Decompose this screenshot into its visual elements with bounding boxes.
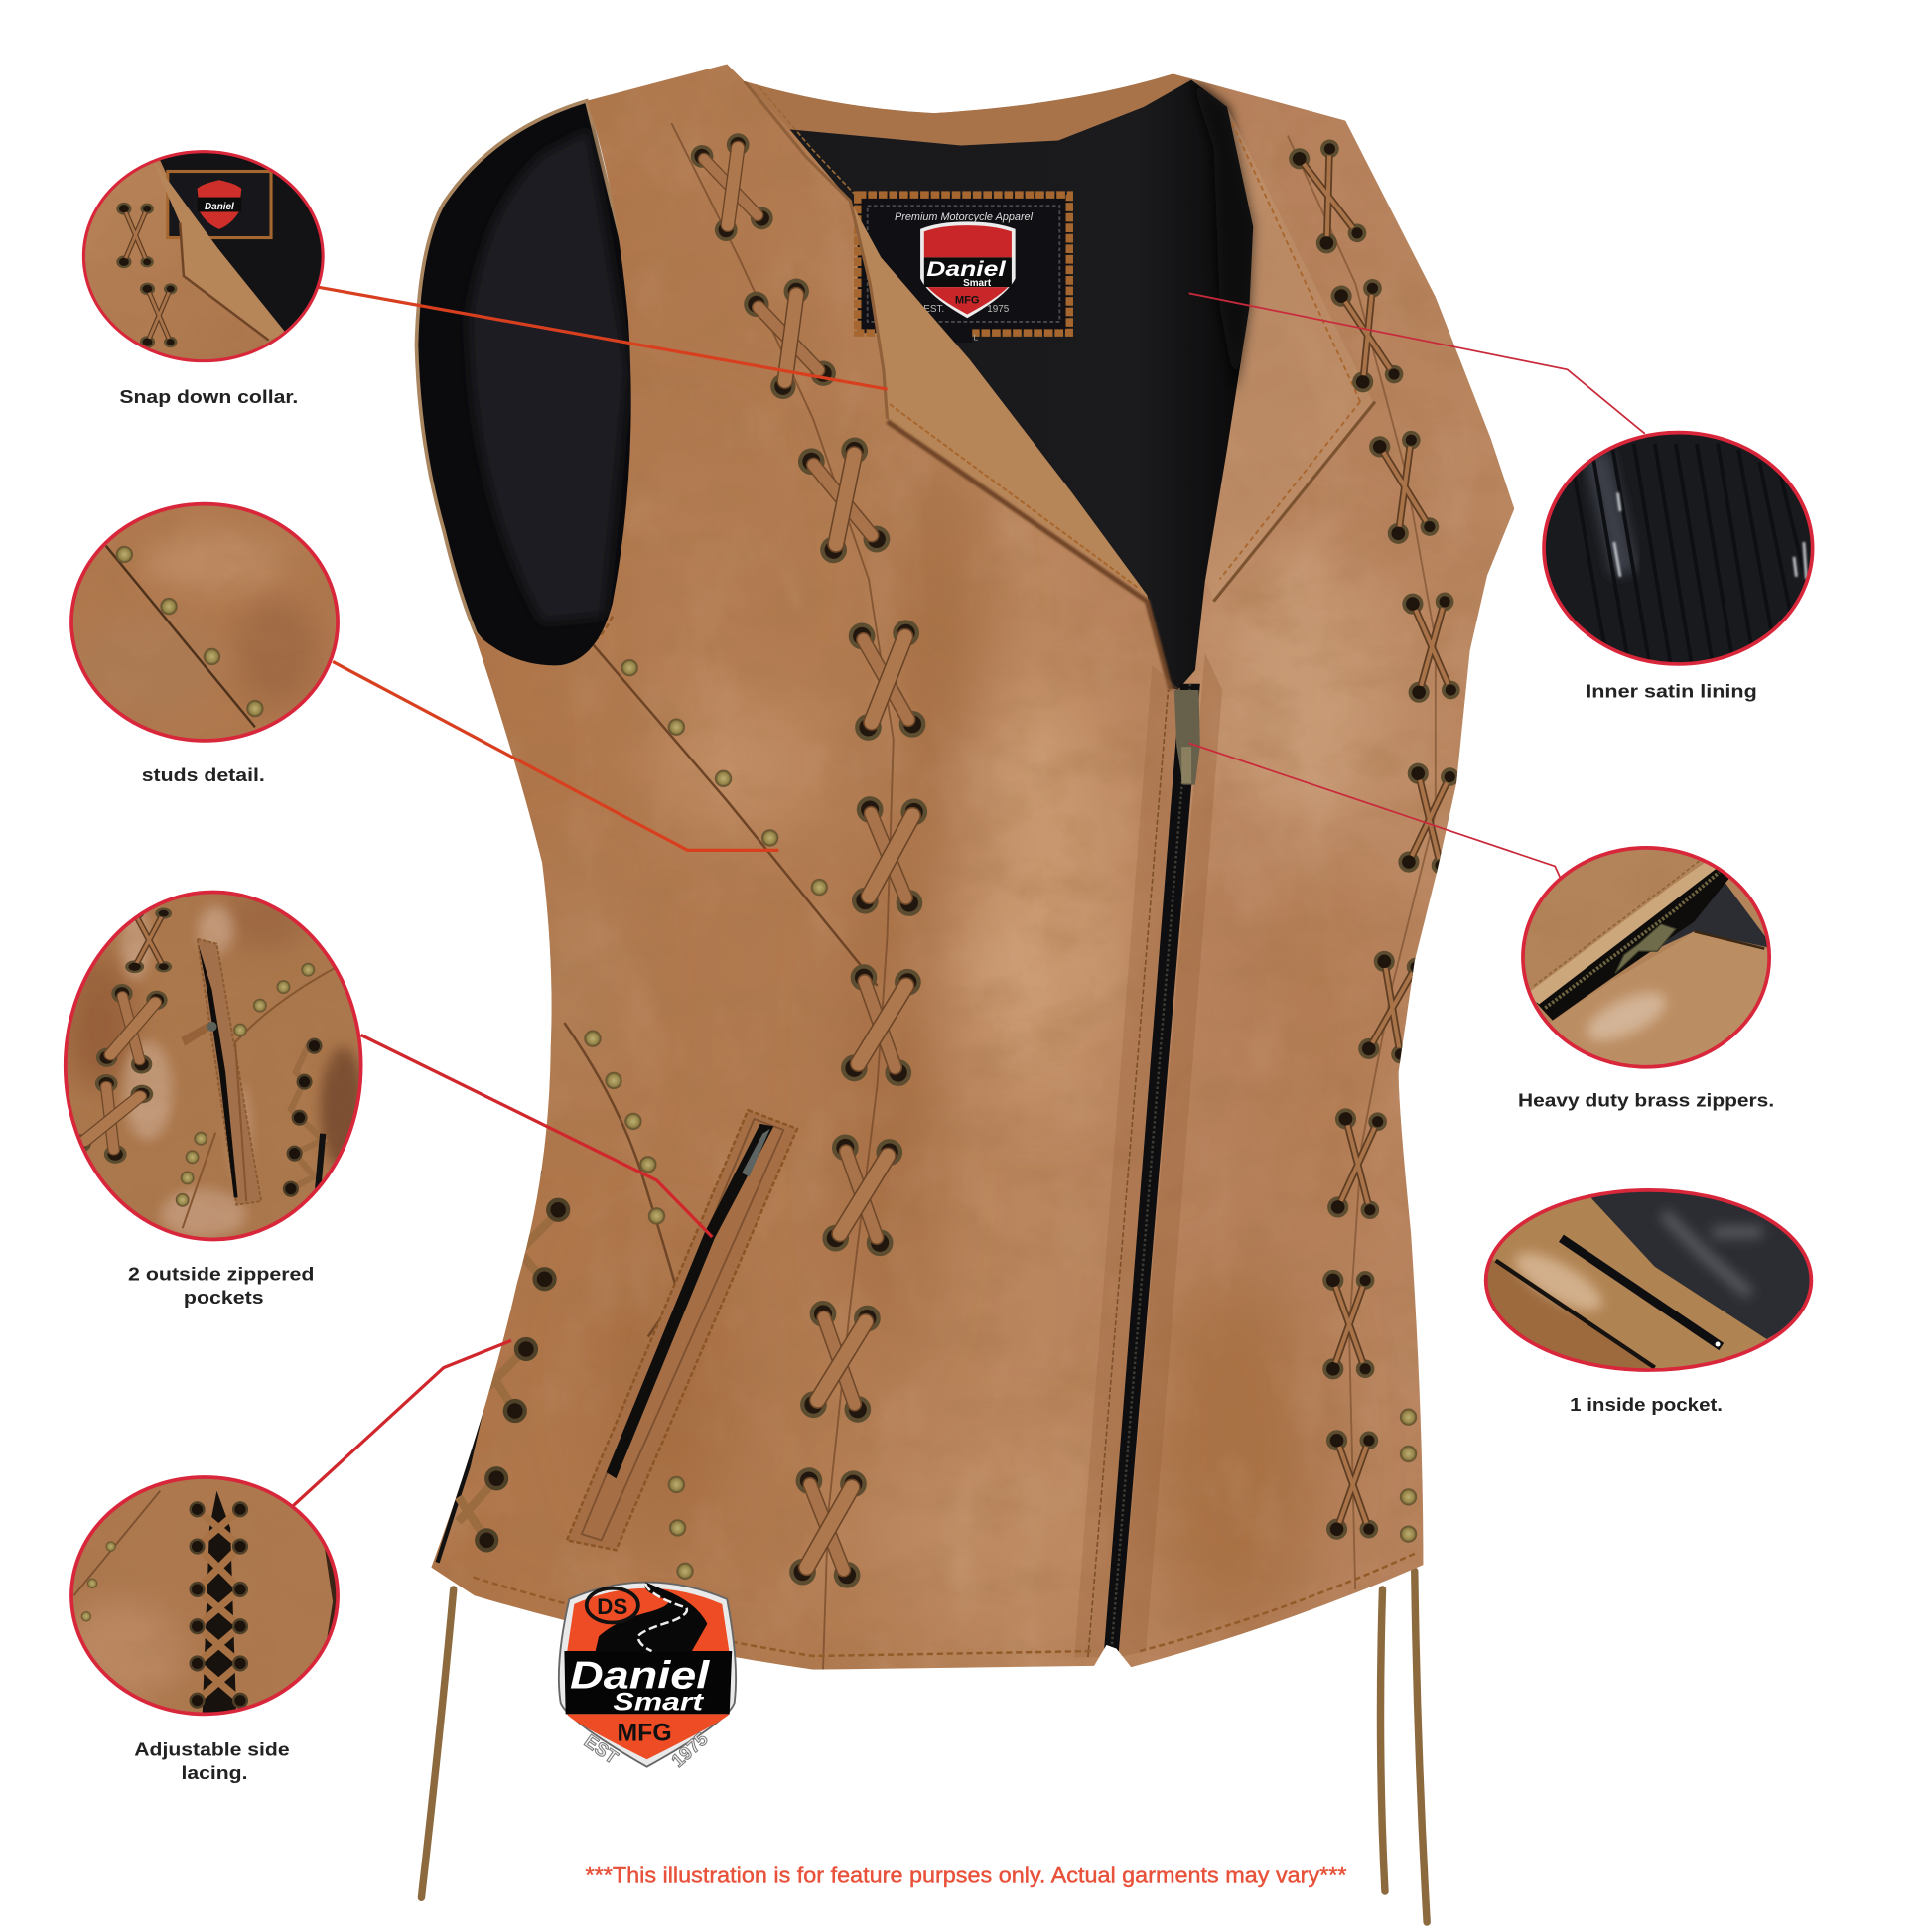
brand neck label: EST. (923, 304, 944, 315)
callout: inner satin lining (1534, 419, 1824, 678)
right collar lapel (1205, 107, 1375, 602)
label: outside zippered pockets (128, 1263, 314, 1308)
neck interior lining (790, 80, 1253, 690)
label: adjustable side lacing: lacing. (181, 1762, 247, 1783)
front zipper (1074, 653, 1222, 1657)
callout: one inside pocket (1478, 1182, 1824, 1380)
brand neck label: Daniel (926, 258, 1007, 281)
brand neck label: Premium Motorcycle Apparel (895, 211, 1034, 223)
brand neck label: Smart (963, 278, 992, 289)
side lacing ties (421, 1571, 1427, 1922)
left chest lacing (690, 133, 926, 1587)
label: snap down collar: Snap down collar. (119, 386, 298, 407)
label: inner satin lining: Inner satin lining (1586, 680, 1757, 701)
callout: snap down collar: Daniel (205, 202, 234, 212)
brand neck label: L (973, 333, 978, 343)
label: studs detail: studs detail. (142, 764, 265, 785)
label: heavy duty brass zippers: Heavy duty brass zippers. (1518, 1089, 1774, 1110)
label: outside zippered pockets: 2 outside zippered (128, 1263, 314, 1284)
logo: Daniel Smart shield: Smart (613, 1690, 705, 1717)
logo DS badge (587, 1588, 638, 1622)
disclaimer note: ***This illustration is for feature purpses only. Actual garments may vary*** (586, 1863, 1347, 1887)
logo: Daniel Smart shield (559, 1583, 736, 1771)
brand neck label (858, 195, 1069, 343)
right chest lacing (1289, 138, 1458, 1538)
label: adjustable side lacing: Adjustable side (134, 1739, 290, 1760)
back panel and armhole lining (416, 101, 653, 678)
left collar lapel (745, 81, 1171, 690)
callout: heavy duty brass zippers (1516, 838, 1780, 1084)
leather body (419, 50, 1528, 1688)
brass studs (585, 660, 1417, 1579)
callout: adjustable side lacing (62, 1466, 345, 1725)
side lacing (438, 1171, 568, 1563)
label: outside zippered pockets: pockets (184, 1287, 264, 1308)
leader lines (293, 287, 1645, 1506)
logo: Daniel Smart shield: Daniel (570, 1654, 711, 1697)
back collar shade (745, 73, 1191, 145)
callout: snap down collar (81, 150, 325, 363)
logo: Daniel Smart shield: DS (597, 1594, 627, 1619)
brand neck label: 1975 (987, 304, 1010, 315)
logo: Daniel Smart shield: 1975 (667, 1728, 712, 1771)
label: one inside pocket: 1 inside pocket. (1570, 1394, 1723, 1415)
logo: Daniel Smart shield: EST (581, 1730, 622, 1768)
callout: studs detail (69, 502, 340, 743)
callout: outside zippered pockets (56, 881, 369, 1251)
label: adjustable side lacing (134, 1739, 290, 1783)
logo: Daniel Smart shield: MFG (618, 1721, 672, 1747)
logo road (595, 1583, 707, 1652)
zipped hip pocket (567, 1110, 797, 1550)
brand neck label: MFG (955, 294, 980, 306)
front seams and stitching (474, 123, 1436, 1670)
leather vest (416, 50, 1528, 1922)
